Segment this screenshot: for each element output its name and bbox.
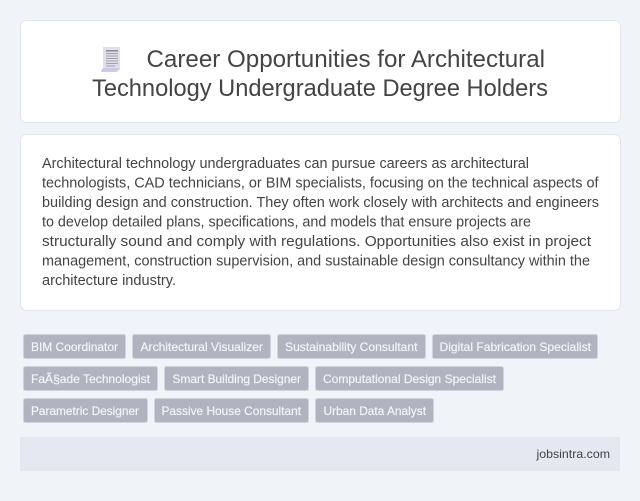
tag: Sustainability Consultant: Sustainability Consultant [285, 340, 418, 354]
tag: Computational Design Specialist: Computational Design Specialist [323, 372, 497, 386]
tag: BIM Coordinator: BIM Coordinator [31, 340, 118, 354]
panel: description [20, 134, 620, 310]
tag: Parametric Designer: Parametric Designer [31, 404, 139, 418]
tag: Digital Fabrication Specialist [432, 334, 598, 358]
tag: Facade Technologist: FaÃ§ade Technologist [31, 372, 151, 386]
tag: Parametric Designer [24, 398, 148, 422]
panel: title header [20, 20, 620, 122]
title [92, 46, 548, 102]
tag: Urban Data Analyst: Urban Data Analyst [324, 404, 427, 418]
text block: description: structurally sound and comply with regulations. Opportunities also exist in project [42, 234, 591, 250]
tags: related careers [24, 334, 598, 422]
text block: description [42, 156, 599, 289]
footer source text: jobsintra.com [535, 447, 610, 461]
text block: description: technologists, CAD technicians, or BIM specialists, focusing on the technical aspects of [42, 176, 599, 192]
tag: Sustainability Consultant [278, 334, 426, 358]
tag: Computational Design Specialist [316, 366, 504, 390]
text block: description: to develop detailed plans, specifications, and models that ensure projects are [42, 214, 531, 230]
tag: Architectural Visualizer [132, 334, 270, 358]
tag: Urban Data Analyst [316, 398, 434, 422]
title: Technology Undergraduate Degree Holders [92, 75, 548, 102]
tag: Smart Building Designer: Smart Building Designer [172, 372, 301, 386]
text block: description: building design and construction. They often work closely with architects and engineers [42, 195, 599, 211]
text block: description: management, construction supervision, and sustainable design consultancy within the [42, 254, 590, 270]
tag: Passive House Consultant: Passive House Consultant [162, 404, 302, 418]
tag: Facade Technologist [24, 366, 158, 390]
icon: document scroll [101, 47, 120, 72]
text block: description: architecture industry. [42, 273, 176, 289]
text block: description: Architectural technology undergraduates can pursue careers as architectural [42, 156, 529, 172]
tag: Architectural Visualizer: Architectural Visualizer [140, 340, 263, 354]
tag: Passive House Consultant [154, 398, 308, 422]
tag: Digital Fabrication Specialist: Digital Fabrication Specialist [440, 340, 592, 354]
tag: Smart Building Designer [164, 366, 308, 390]
title: Career Opportunities for Architectural [146, 46, 545, 73]
tag: BIM Coordinator [24, 334, 126, 358]
footer [20, 437, 620, 471]
